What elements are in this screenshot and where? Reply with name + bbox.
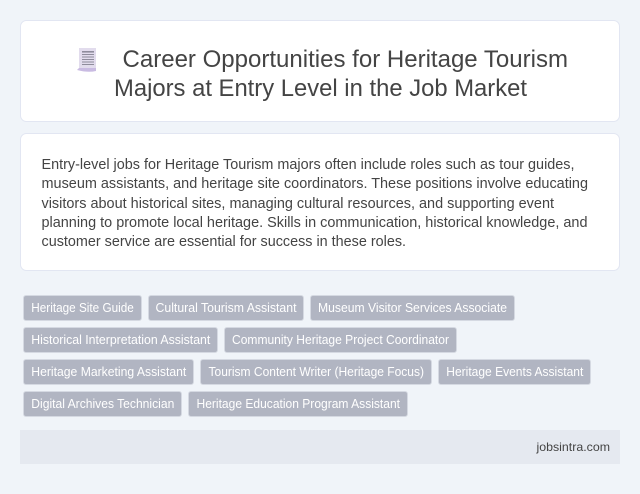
- tag: Community Heritage Project Coordinator: [224, 328, 456, 352]
- heading: Career Opportunities for Heritage Tourism: [122, 46, 568, 73]
- tag: Heritage Education Program Assistant: Heritage Education Program Assistant: [196, 397, 401, 411]
- tag: Community Heritage Project Coordinator: Community Heritage Project Coordinator: [232, 333, 449, 347]
- panel: description: [20, 134, 620, 270]
- tag: Historical Interpretation Assistant: Historical Interpretation Assistant: [31, 333, 211, 347]
- tag: Heritage Events Assistant: Heritage Events Assistant: [446, 365, 584, 379]
- tag: Tourism Content Writer (Heritage Focus): [200, 360, 432, 384]
- tag: Cultural Tourism Assistant: Cultural Tourism Assistant: [156, 301, 297, 315]
- text block: description: museum assistants, and heritage site coordinators. These positions involve educating: [42, 176, 588, 192]
- text block: description: customer service are essential for success in these roles.: [42, 234, 406, 250]
- footer credit: jobsintra.com: [535, 440, 610, 454]
- tag: Heritage Events Assistant: [438, 360, 590, 384]
- text block: description: planning to promote local heritage. Skills in communication, historical knowledge, and: [42, 215, 588, 231]
- tag: Heritage Marketing Assistant: [24, 360, 194, 384]
- heading: Majors at Entry Level in the Job Market: [114, 75, 527, 102]
- text block: description: visitors about historical sites, managing cultural resources, and supporting event: [42, 196, 554, 212]
- tag: Heritage Marketing Assistant: Heritage Marketing Assistant: [31, 365, 187, 379]
- tag: Historical Interpretation Assistant: [24, 328, 218, 352]
- tag: Museum Visitor Services Associate: Museum Visitor Services Associate: [318, 301, 507, 315]
- text block: description: [42, 157, 588, 250]
- panel: title card: [20, 20, 620, 122]
- tag: Digital Archives Technician: [24, 392, 182, 416]
- tag: Digital Archives Technician: Digital Archives Technician: [31, 397, 174, 411]
- footer: [20, 430, 620, 464]
- text block: description: Entry-level jobs for Heritage Tourism majors often include roles such as tour guides,: [42, 157, 574, 173]
- tag: Museum Visitor Services Associate: [310, 296, 514, 320]
- tag list: [24, 296, 590, 416]
- tag: Heritage Site Guide: [24, 296, 142, 320]
- tag: Cultural Tourism Assistant: [148, 296, 304, 320]
- tag: Heritage Site Guide: Heritage Site Guide: [31, 301, 134, 315]
- heading: [114, 46, 568, 102]
- tag: Tourism Content Writer (Heritage Focus): Tourism Content Writer (Heritage Focus): [208, 365, 424, 379]
- icon: paper scroll: [77, 48, 96, 72]
- tag: Heritage Education Program Assistant: [188, 392, 408, 416]
